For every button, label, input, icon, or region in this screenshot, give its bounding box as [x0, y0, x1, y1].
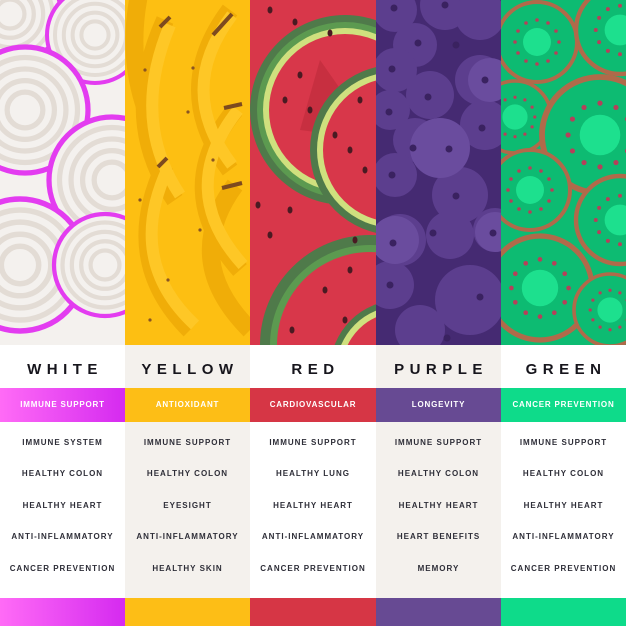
list: white benefits	[10, 438, 115, 573]
list: purple benefits: HEALTHY COLON	[398, 469, 479, 478]
band: cardiovascular	[250, 388, 376, 422]
list: purple benefits	[395, 438, 482, 573]
band: antioxidant	[125, 388, 250, 422]
list: green benefits: HEALTHY HEART	[524, 501, 603, 510]
list: yellow benefits: HEALTHY SKIN	[152, 564, 223, 573]
band: immune support	[0, 388, 125, 422]
panel: purple berries	[376, 0, 501, 345]
panel: white onion	[0, 0, 125, 345]
list: purple benefits: IMMUNE SUPPORT	[395, 438, 482, 447]
list: purple benefits: HEART BENEFITS	[397, 532, 480, 541]
list: purple benefits: MEMORY	[418, 564, 459, 573]
list: yellow benefits: HEALTHY COLON	[147, 469, 228, 478]
list: white benefits: HEALTHY HEART	[23, 501, 102, 510]
list: white benefits: CANCER PREVENTION	[10, 564, 115, 573]
list: white benefits: IMMUNE SYSTEM	[22, 438, 103, 447]
list: green benefits: IMMUNE SUPPORT	[520, 438, 607, 447]
list: red benefits: HEALTHY LUNG	[276, 469, 350, 478]
column: white	[0, 345, 125, 626]
panel: red watermelon	[250, 0, 376, 345]
column: red	[250, 345, 376, 626]
list: red benefits: CANCER PREVENTION	[260, 564, 366, 573]
column: purple	[376, 345, 501, 626]
panel: green kiwi	[501, 0, 626, 345]
band: antioxidant: ANTIOXIDANT	[156, 400, 219, 409]
band: immune support: IMMUNE SUPPORT	[20, 400, 105, 409]
list: green benefits: ANTI-INFLAMMATORY	[512, 532, 615, 541]
list: red benefits: IMMUNE SUPPORT	[269, 438, 357, 447]
band: cancer prevention	[501, 388, 626, 422]
heading: WHITE: WHITE	[27, 361, 103, 378]
illustration strip	[0, 0, 626, 345]
list: red benefits	[260, 438, 366, 573]
band: longevity: LONGEVITY	[412, 400, 465, 409]
list: yellow benefits: IMMUNE SUPPORT	[144, 438, 231, 447]
list: green benefits	[511, 438, 616, 573]
band: longevity	[376, 388, 501, 422]
list: green benefits: CANCER PREVENTION	[511, 564, 616, 573]
list: white benefits: HEALTHY COLON	[22, 469, 103, 478]
list: red benefits: HEALTHY HEART	[273, 501, 353, 510]
list: purple benefits: HEALTHY HEART	[399, 501, 478, 510]
band: cardiovascular: CARDIOVASCULAR	[270, 400, 356, 409]
list: yellow benefits: ANTI-INFLAMMATORY	[136, 532, 239, 541]
band: cancer prevention: CANCER PREVENTION	[512, 400, 615, 409]
heading: RED: RED	[291, 361, 340, 378]
list: yellow benefits	[136, 438, 239, 573]
column: yellow	[125, 345, 250, 626]
heading: YELLOW: YELLOW	[141, 361, 239, 378]
heading: GREEN: GREEN	[526, 361, 606, 378]
list: yellow benefits: EYESIGHT	[163, 501, 212, 510]
list: white benefits: ANTI-INFLAMMATORY	[11, 532, 114, 541]
panel: yellow banana	[125, 0, 250, 345]
heading: PURPLE: PURPLE	[394, 361, 488, 378]
list: red benefits: ANTI-INFLAMMATORY	[262, 532, 364, 541]
column: green	[501, 345, 626, 626]
list: green benefits: HEALTHY COLON	[523, 469, 604, 478]
